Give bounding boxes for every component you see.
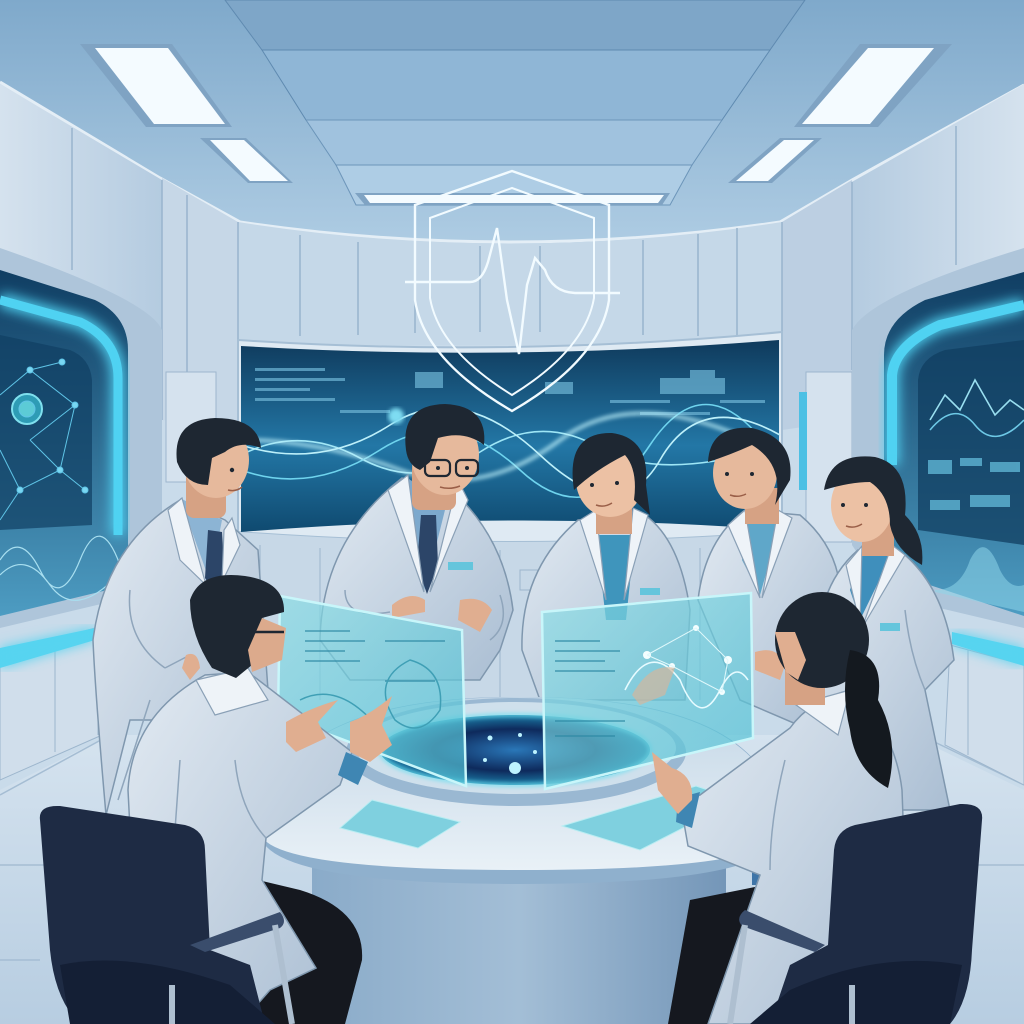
panel: left holographic display (278, 596, 466, 786)
holographic pool (380, 715, 650, 785)
left glow strip (0, 628, 95, 668)
right glow strip (952, 632, 1024, 666)
lower cabinet behind people (238, 532, 782, 700)
person: seated man, foreground left (128, 575, 392, 1024)
network graph (0, 359, 88, 520)
person: centre woman (522, 433, 690, 700)
ceiling lights (80, 44, 952, 205)
table: round hologram table (260, 697, 782, 1024)
lower wall cabinets right (945, 645, 1024, 785)
person: far-right woman (755, 456, 954, 810)
chair: right (730, 804, 982, 1024)
panel: right holographic display (542, 593, 753, 789)
panel: left wall screen (0, 248, 162, 628)
hands (286, 700, 338, 752)
chair: left (40, 806, 292, 1024)
floor (0, 735, 1024, 1024)
coat body (128, 672, 352, 1024)
wall panels (0, 84, 1024, 542)
trousers (235, 880, 362, 1024)
panel: right wall screen (852, 248, 1024, 628)
ceiling (0, 0, 1024, 245)
person: back-right woman (698, 428, 838, 730)
person: standing man with glasses (320, 404, 513, 680)
head (190, 575, 284, 678)
icon: shield with heartbeat (405, 171, 620, 411)
person: seated woman, foreground right (652, 592, 906, 1024)
person: back-left man (93, 418, 268, 815)
keyboard pads (340, 800, 460, 848)
panel: central wall screen (238, 332, 782, 700)
lower wall cabinets left (0, 625, 118, 780)
